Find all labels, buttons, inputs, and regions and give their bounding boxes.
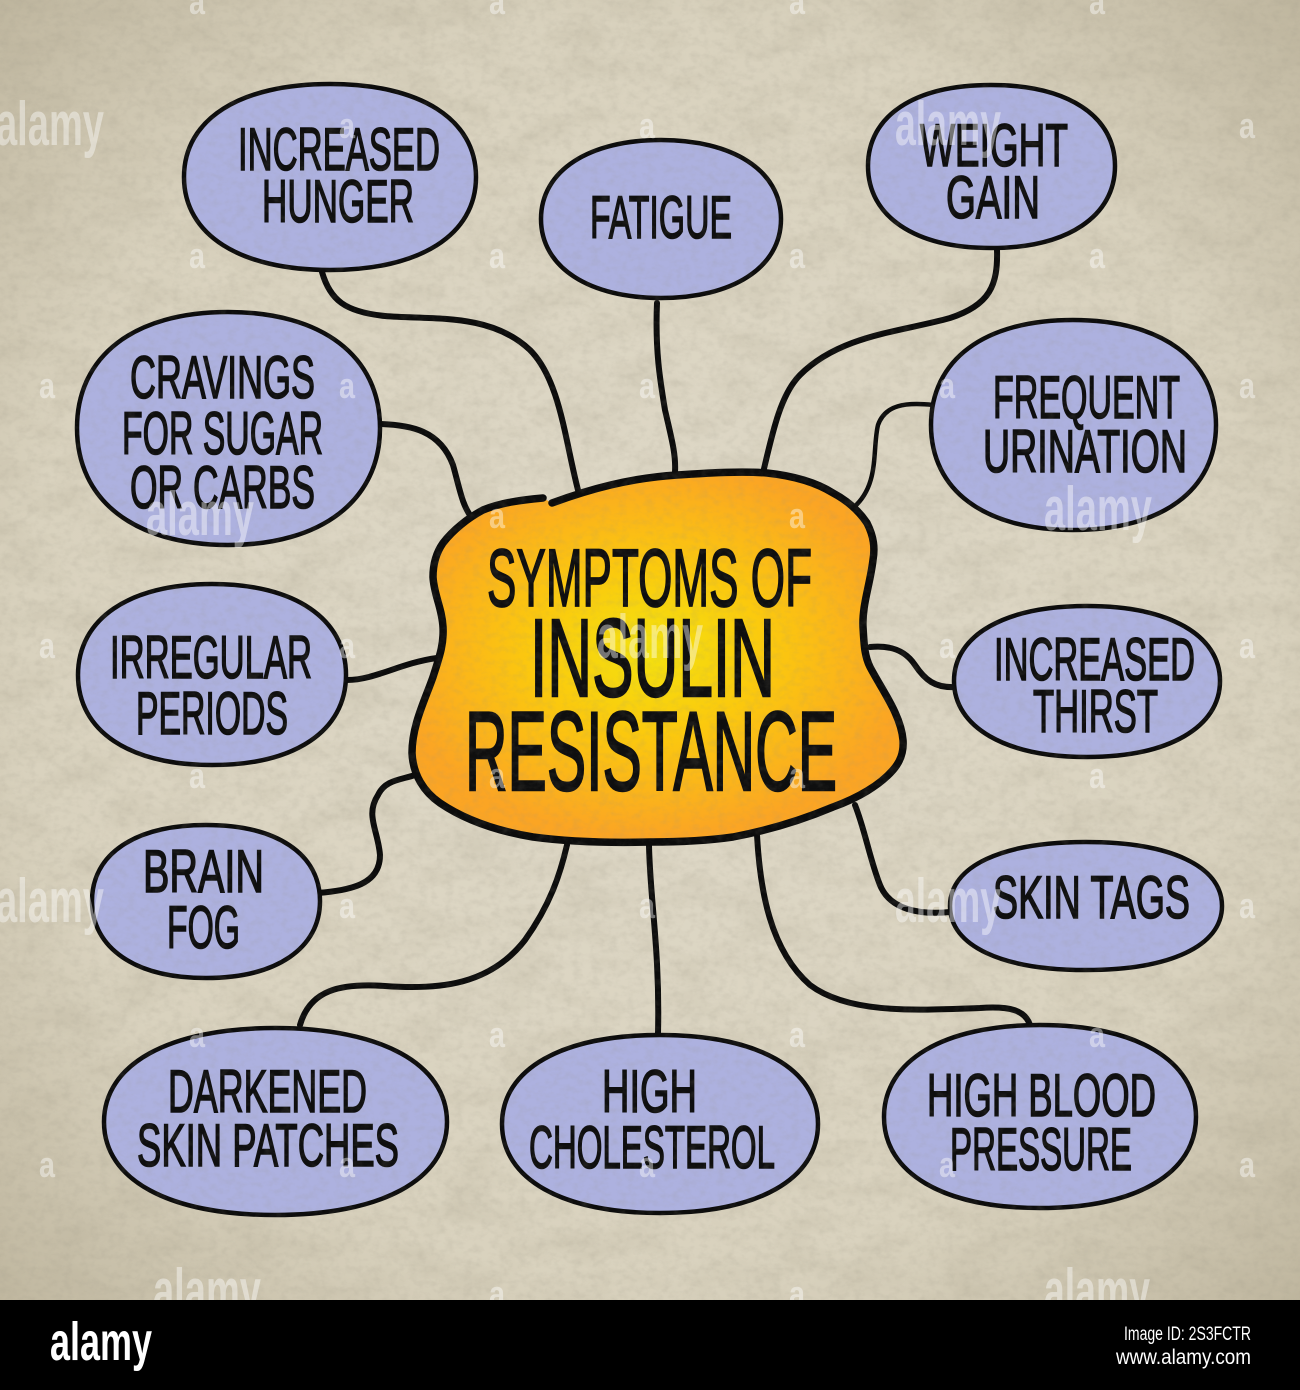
- connector: cravings: [381, 424, 472, 518]
- stock watermarks: a: [339, 885, 356, 926]
- node: skin tags: SKIN TAGS: [993, 864, 1190, 931]
- connector: irregular periods: [347, 658, 437, 680]
- central node: symptoms of insulin resistance: [412, 472, 903, 842]
- footer logo: alamy: [50, 1312, 152, 1372]
- stock watermarks: alamy: [1044, 475, 1152, 544]
- stock watermarks: a: [939, 625, 956, 666]
- node: increased hunger: [184, 84, 476, 270]
- node: frequent urination: [931, 320, 1216, 530]
- connector: darkened skin patches: [300, 845, 567, 1025]
- connector: skin tags: [855, 805, 950, 913]
- node: high blood pressure: [884, 1025, 1196, 1208]
- node: weight gain: [868, 85, 1115, 248]
- stock watermarks: a: [639, 365, 656, 406]
- title text: [465, 533, 837, 814]
- stock watermarks: a: [189, 1014, 206, 1055]
- stock watermarks: a: [1239, 1144, 1256, 1185]
- stock watermarks: alamy: [895, 867, 1001, 936]
- connector: high blood pressure: [757, 835, 1030, 1025]
- stock watermarks: a: [189, 235, 206, 276]
- node: weight gain: WEIGHT: [920, 112, 1068, 179]
- stock watermarks: a: [1239, 625, 1256, 666]
- node: brain fog: [92, 825, 320, 978]
- website: www.alamy.com: [1115, 1346, 1251, 1369]
- node: increased thirst: THIRST: [1033, 678, 1158, 745]
- node: increased hunger: HUNGER: [262, 168, 414, 235]
- node: darkened skin patches: DARKENED: [168, 1058, 367, 1125]
- connector: brain fog: [318, 775, 415, 893]
- node: fatigue: FATIGUE: [590, 184, 732, 251]
- title text: SYMPTOMS OF: [487, 533, 812, 624]
- stock watermarks: a: [789, 495, 806, 536]
- stock watermarks: a: [39, 365, 56, 406]
- node: high cholesterol: HIGH: [602, 1058, 697, 1125]
- node: fatigue: [541, 140, 781, 298]
- node: frequent urination: URINATION: [983, 418, 1187, 485]
- node: cravings for sugar or carbs: OR CARBS: [130, 454, 315, 521]
- node: increased hunger: INCREASED: [238, 116, 440, 183]
- stock watermarks: a: [339, 365, 356, 406]
- connector: increased hunger: [322, 272, 578, 490]
- connector: high cholesterol: [649, 845, 658, 1033]
- stock watermarks: alamy: [0, 867, 104, 936]
- node: brain fog: BRAIN: [143, 838, 264, 905]
- stock watermarks: a: [489, 755, 506, 796]
- image id: Image ID: 2S3FCTR: [1124, 1324, 1251, 1345]
- node: high cholesterol: CHOLESTEROL: [529, 1114, 775, 1181]
- node: brain fog: FOG: [167, 894, 240, 961]
- stock watermarks: alamy: [1044, 1257, 1150, 1326]
- title text: RESISTANCE: [465, 689, 837, 814]
- node: cravings for sugar or carbs: [77, 312, 380, 545]
- connector: frequent urination: [853, 404, 933, 508]
- stock watermarks: a: [339, 105, 356, 146]
- node: darkened skin patches: SKIN PATCHES: [137, 1112, 399, 1179]
- stock watermarks: a: [489, 1273, 506, 1314]
- stock watermarks: a: [1089, 1014, 1106, 1055]
- node: high blood pressure: HIGH BLOOD: [927, 1062, 1156, 1129]
- footer bar: [0, 1300, 1300, 1390]
- stock watermarks: a: [639, 105, 656, 146]
- stock watermarks: a: [789, 235, 806, 276]
- stock watermarks: a: [939, 365, 956, 406]
- stock watermarks: a: [789, 755, 806, 796]
- stock watermarks: alamy: [146, 480, 254, 549]
- stock watermarks: alamy: [153, 1257, 261, 1326]
- stock watermarks: a: [939, 1144, 956, 1185]
- connector: weight gain: [763, 250, 997, 473]
- connector: fatigue: [657, 303, 675, 472]
- stock watermarks: a: [639, 885, 656, 926]
- stock watermarks: a: [339, 1144, 356, 1185]
- node: irregular periods: IRREGULAR: [110, 624, 312, 691]
- stock watermarks: a: [789, 1273, 806, 1314]
- central blob: [412, 472, 903, 842]
- node: skin tags: [950, 842, 1222, 970]
- stock watermarks: a: [39, 625, 56, 666]
- stock watermarks: a: [1239, 885, 1256, 926]
- stock watermarks: a: [1089, 235, 1106, 276]
- stock watermarks: a: [1239, 105, 1256, 146]
- node: irregular periods: PERIODS: [136, 680, 288, 747]
- node: cravings for sugar or carbs: FOR SUGAR: [122, 400, 323, 467]
- stock watermarks: a: [189, 755, 206, 796]
- node: weight gain: GAIN: [946, 164, 1040, 231]
- stock watermarks: alamy: [0, 90, 104, 159]
- stock watermarks: a: [489, 495, 506, 536]
- stock watermarks: alamy: [895, 90, 1001, 159]
- stock watermarks: alamy: [597, 603, 703, 672]
- node: cravings for sugar or carbs: CRAVINGS: [130, 344, 315, 411]
- node: darkened skin patches: [104, 1028, 447, 1215]
- stock watermarks: a: [1239, 365, 1256, 406]
- stock watermarks: a: [339, 625, 356, 666]
- node: irregular periods: [78, 584, 346, 765]
- node: high blood pressure: PRESSURE: [950, 1116, 1132, 1183]
- stock watermarks: a: [1089, 755, 1106, 796]
- node: high cholesterol: [502, 1035, 818, 1213]
- stock watermarks: a: [789, 1014, 806, 1055]
- node: increased thirst: [954, 606, 1220, 757]
- stock watermarks: a: [489, 1014, 506, 1055]
- connector: increased thirst: [870, 647, 955, 687]
- stock watermarks: a: [39, 1144, 56, 1185]
- stock watermarks: a: [639, 1144, 656, 1185]
- stock watermarks: a: [489, 235, 506, 276]
- title text: INSULIN: [530, 597, 775, 720]
